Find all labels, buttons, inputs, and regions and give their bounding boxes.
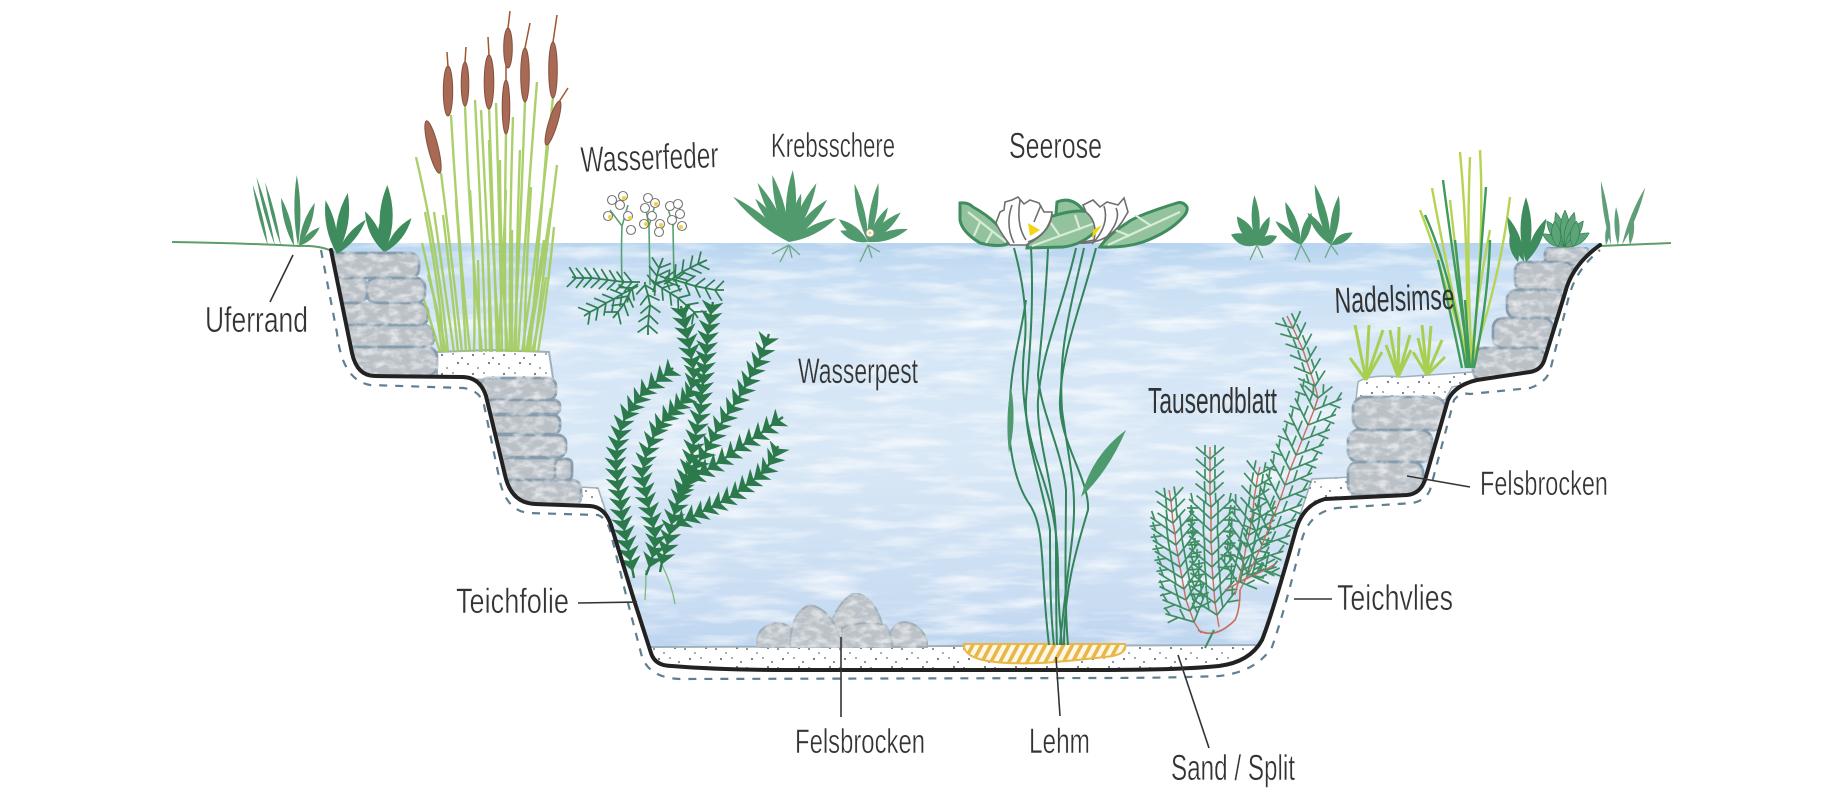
label: Uferrand: Uferrand — [205, 299, 308, 340]
label: Felsbrocken bottom: Felsbrocken — [795, 723, 925, 761]
shore grass left — [251, 175, 322, 248]
water soldier rosettes — [731, 170, 909, 262]
water lily stems — [1009, 248, 1096, 645]
water lily leaves — [960, 200, 1187, 248]
ground line right — [1600, 243, 1671, 246]
water feather flowers — [604, 192, 686, 285]
label: Sand/Split: Sand / Split — [1171, 747, 1295, 788]
Wasserpest plant — [616, 302, 783, 604]
label: Felsbrocken right — [1407, 465, 1608, 503]
label: Lehm: Lehm — [1029, 722, 1090, 761]
label: Teichfolie: Teichfolie — [456, 582, 569, 621]
label: Krebsschere: Krebsschere — [771, 127, 895, 165]
water lily submerged leaves — [1007, 387, 1126, 497]
pond liner black line — [331, 245, 1600, 670]
label: Tausendblatt: Tausendblatt — [1148, 380, 1277, 421]
stone walls — [326, 247, 1589, 506]
needle rush tall clump — [1420, 150, 1510, 368]
shore plants on the stones — [321, 185, 415, 257]
sand and gravel layers — [437, 350, 1476, 680]
water feather leaves — [572, 258, 724, 335]
water lily flowers — [996, 197, 1128, 245]
label: Wasserfeder: Wasserfeder — [580, 134, 719, 180]
label: Felsbrocken right: Felsbrocken — [1480, 465, 1608, 503]
ground line left — [172, 242, 334, 252]
stones on the pond floor — [757, 593, 928, 648]
label: Nadelsimse: Nadelsimse — [1334, 276, 1455, 321]
label: Teichvlies: Teichvlies — [1337, 577, 1453, 618]
label: Wasserpest: Wasserpest — [798, 352, 918, 391]
cattails — [416, 11, 568, 352]
bank plants right — [1503, 180, 1648, 264]
needle rush small tufts — [1350, 325, 1445, 380]
small rosettes right of the lilies — [1229, 183, 1355, 262]
label: Seerose: Seerose — [1009, 125, 1102, 166]
label: Lehm — [1029, 657, 1090, 761]
label: Sand/Split — [1171, 655, 1295, 788]
geotextile fleece dashed line — [321, 250, 1600, 679]
label: Felsbrocken bottom — [795, 637, 925, 761]
pond water — [331, 243, 1603, 670]
clay patch — [964, 644, 1125, 663]
hornwort Tausendblatt — [1169, 316, 1318, 648]
label: Uferrand — [205, 255, 308, 340]
